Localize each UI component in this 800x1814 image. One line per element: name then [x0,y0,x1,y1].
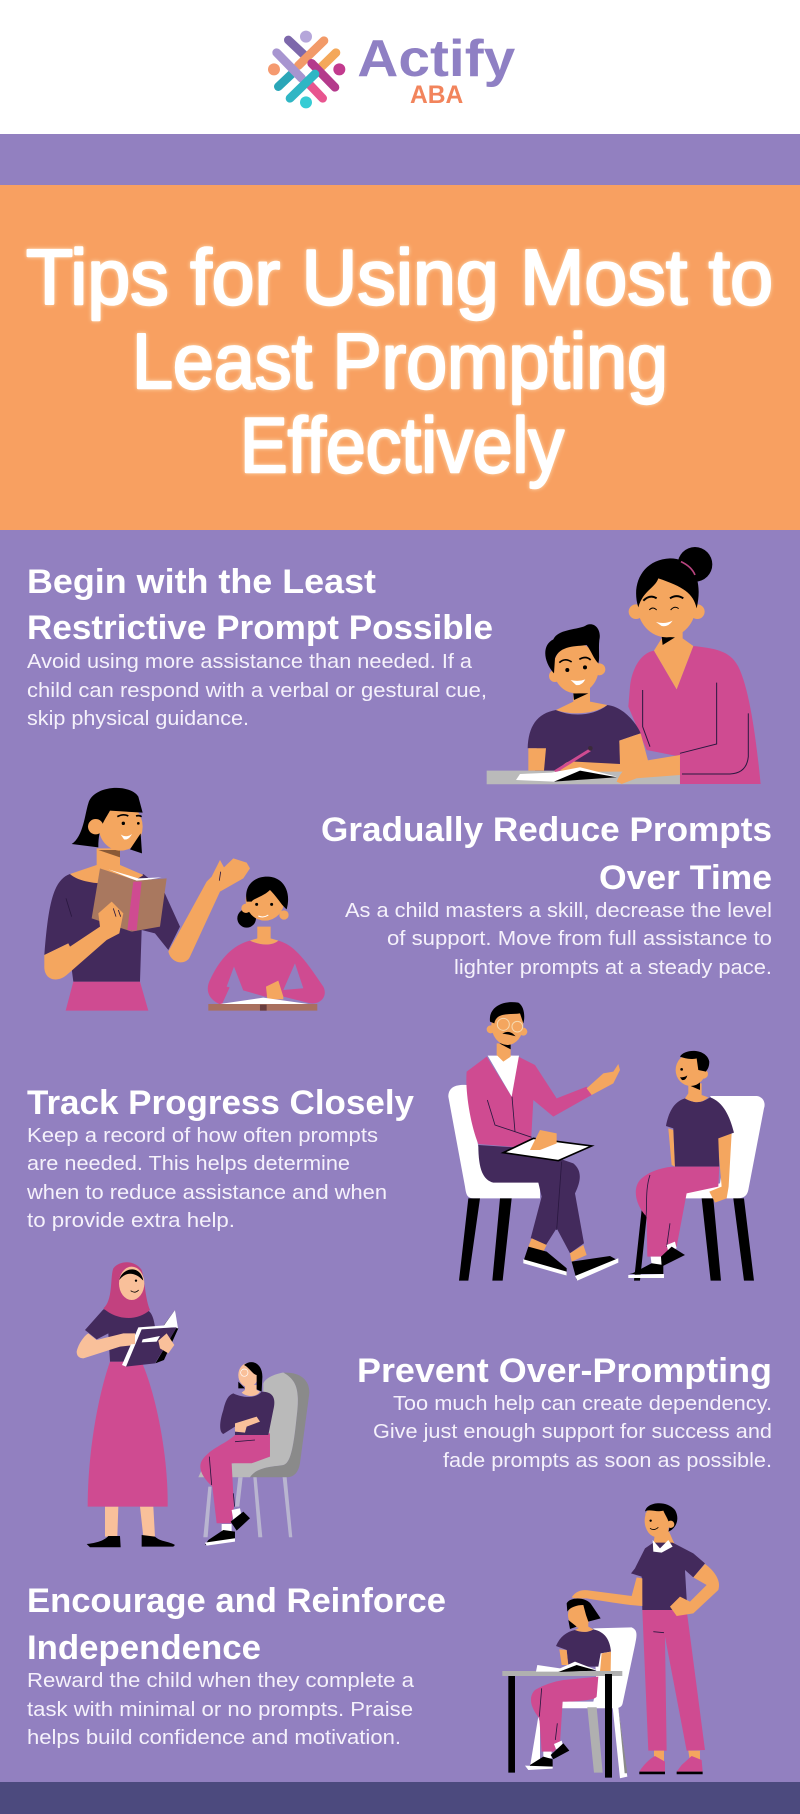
tip 1 text [27,563,493,730]
logo wordmark: Actify [357,30,515,88]
illustration: woman reading to girl [44,788,325,1011]
title [26,233,773,489]
header band [0,0,800,134]
tip 1 text: skip physical guidance. [27,707,249,730]
tip 3 text [26,1084,414,1232]
tip 3 text: when to reduce assistance and when [26,1181,387,1204]
tip 1 text: Begin with the Least [27,563,376,601]
tip 2 text: Over Time [599,859,772,897]
title: Effectively [240,401,564,489]
illustration: man praising seated girl [502,1503,719,1778]
tip 1 text: Restrictive Prompt Possible [27,609,493,647]
tip 2 text: Gradually Reduce Prompts [321,811,772,849]
tip 3 text: to provide extra help. [27,1209,235,1232]
tip 1 text: Avoid using more assistance than needed. If a [27,650,473,673]
tip 5 text: Reward the child when they complete a [27,1669,415,1692]
title: Least Prompting [132,317,668,405]
tip 2 text: lighter prompts at a steady pace. [454,956,772,979]
tip 1 text: child can respond with a verbal or gestural cue, [27,679,487,702]
tip 5 text: Encourage and Reinforce [27,1582,446,1620]
tip 2 text [321,811,772,979]
tip 5 text: helps build confidence and motivation. [27,1726,401,1749]
illustration: therapist and child seated [448,1002,765,1281]
logo mark strokes [277,40,336,98]
tip 4 text: fade prompts as soon as possible. [443,1449,772,1472]
logo [268,30,515,109]
tip 2 text: As a child masters a skill, decrease the level [345,899,772,922]
tip 2 text: of support. Move from full assistance to [387,927,772,950]
title banner [0,185,800,530]
tip 3 text: Keep a record of how often prompts [27,1124,378,1147]
logo sub-wordmark: ABA [410,81,463,109]
tip 4 text: Prevent Over-Prompting [357,1352,772,1390]
tip 3 text: are needed. This helps determine [27,1152,350,1175]
tip 3 text: Track Progress Closely [27,1084,414,1122]
footer band [0,1782,800,1814]
tip 4 text [357,1352,772,1472]
tip 5 text: Independence [27,1629,261,1667]
title: Tips for Using Most to [26,233,773,321]
tip 4 text: Too much help can create dependency. [393,1392,772,1415]
tip 5 text: task with minimal or no prompts. Praise [27,1698,413,1721]
illustration: woman in hijab with book and seated girl [77,1262,309,1547]
illustration: woman helping boy write [487,547,761,784]
tip 5 text [27,1582,446,1749]
logo mark dots [268,31,345,108]
tip 4 text: Give just enough support for success and [373,1420,772,1443]
